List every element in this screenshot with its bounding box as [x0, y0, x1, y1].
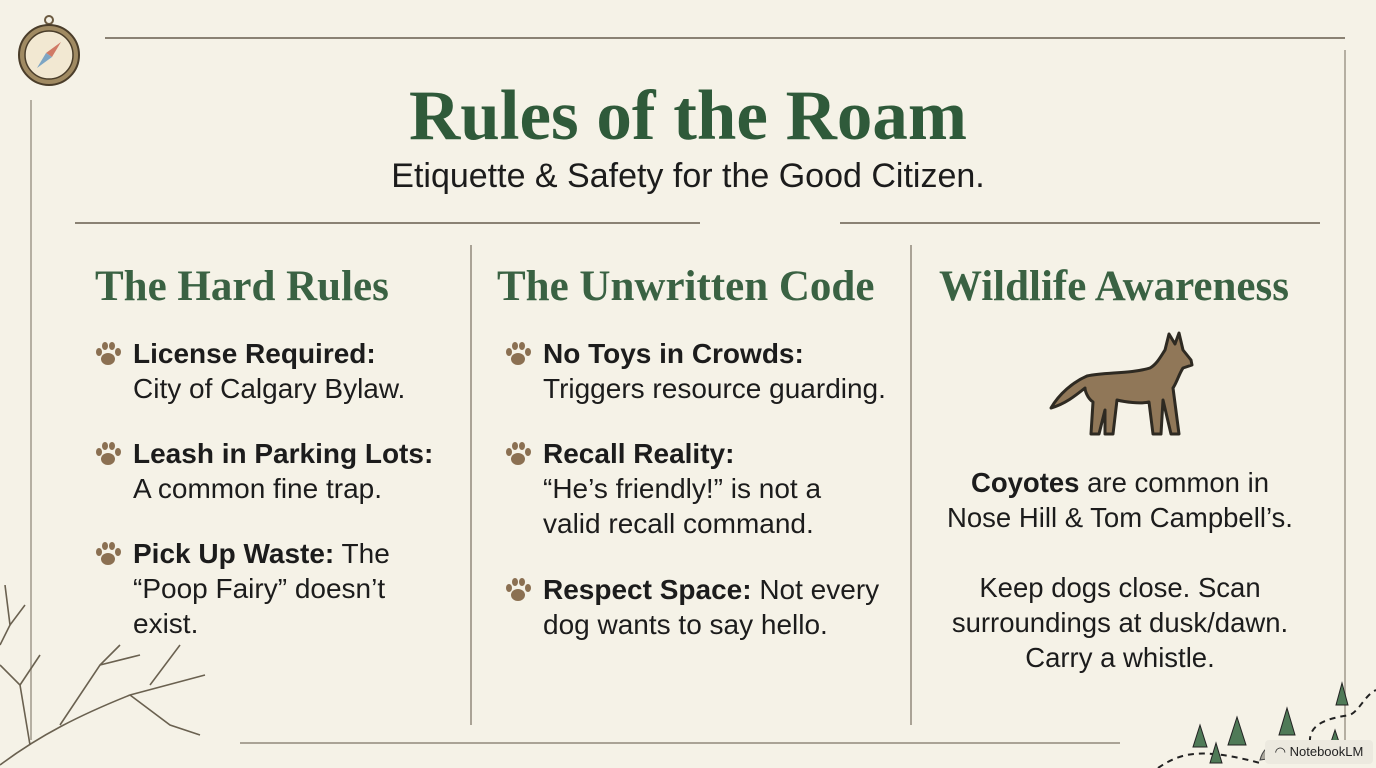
icon: coyote [1050, 332, 1194, 436]
title: Rules of the Roam [409, 77, 967, 155]
item: waste: Pick Up Waste: The [133, 538, 390, 569]
panel: hard rules [95, 263, 433, 639]
item: waste: exist. [133, 608, 198, 639]
item: toys: No Toys in Crowds: [543, 338, 804, 369]
item: license [96, 338, 405, 404]
item: toys: Triggers resource guarding. [543, 373, 886, 404]
panel: wildlife [939, 263, 1293, 673]
item: license: City of Calgary Bylaw. [133, 373, 405, 404]
text: coyotes: Nose Hill & Tom Campbell’s. [947, 502, 1293, 533]
item: leash: A common fine trap. [133, 473, 382, 504]
heading: wildlife: Wildlife Awareness [939, 263, 1289, 310]
panel: unwritten code [497, 263, 886, 640]
item: waste [96, 538, 390, 639]
item: recall: Recall Reality: [543, 438, 734, 469]
item: recall: “He’s friendly!” is not a [543, 473, 821, 504]
text: advice: surroundings at dusk/dawn. [952, 607, 1288, 638]
item: leash [96, 438, 433, 504]
item: toys [506, 338, 886, 404]
icon: compass [18, 15, 80, 86]
item: space: Respect Space: Not every [543, 574, 879, 605]
item: space: dog wants to say hello. [543, 609, 828, 640]
text: advice: Carry a whistle. [1025, 642, 1215, 673]
subtitle: Etiquette & Safety for the Good Citizen. [391, 157, 985, 195]
heading: unwritten code: The Unwritten Code [497, 263, 874, 310]
text: advice: Keep dogs close. Scan [979, 572, 1261, 603]
text: advice [952, 572, 1288, 673]
text: coyotes [947, 467, 1293, 533]
illustration: trees and trail [1158, 681, 1376, 768]
heading: hard rules: The Hard Rules [95, 263, 389, 310]
badge: NotebookLM [1265, 740, 1373, 764]
illustration: branches [0, 585, 206, 766]
item: recall: valid recall command. [543, 508, 814, 539]
item: waste: “Poop Fairy” doesn’t [133, 573, 385, 604]
badge: NotebookLM: ◠ NotebookLM [1275, 744, 1363, 759]
text: coyotes: Coyotes are common in [971, 467, 1269, 498]
item: leash: Leash in Parking Lots: [133, 438, 433, 469]
item: license: License Required: [133, 338, 376, 369]
item: recall [506, 438, 822, 539]
item: space [506, 574, 879, 640]
